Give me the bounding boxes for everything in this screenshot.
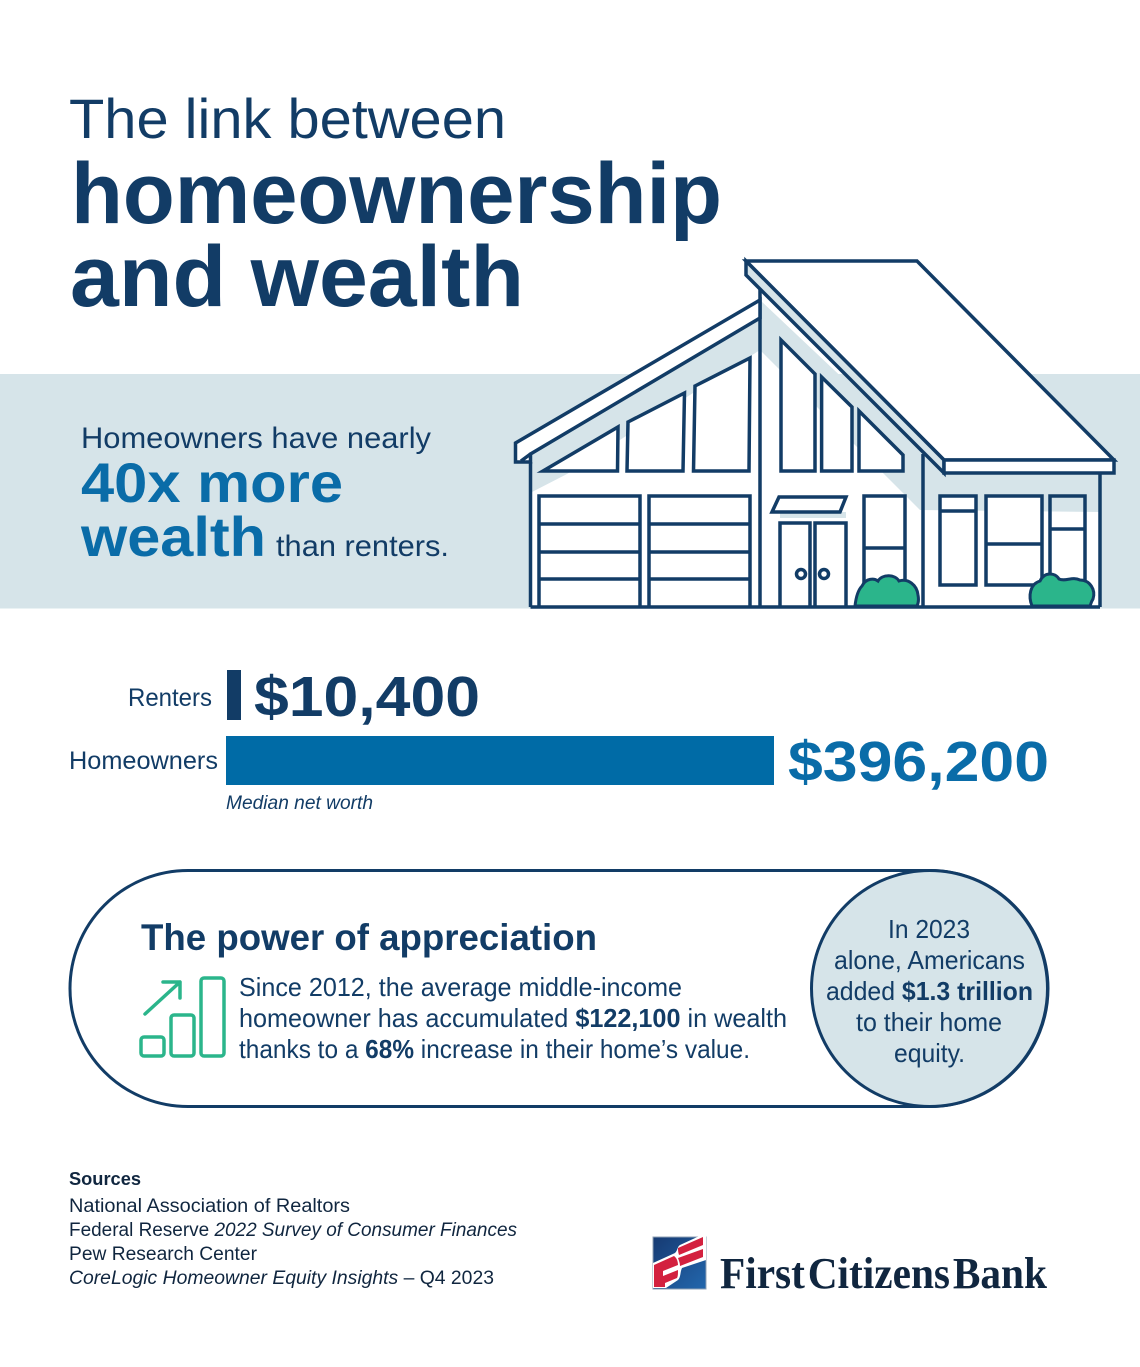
banner statement	[80, 422, 449, 568]
sources: Federal Reserve 2022 Survey of Consumer Finances	[69, 1220, 517, 1241]
appreciation body text: homeowner has accumulated $122,100 in wealth	[239, 1003, 787, 1033]
bar chart: median net worth: Median net worth	[226, 793, 373, 814]
title: The link between	[69, 87, 506, 150]
appreciation body text	[239, 972, 787, 1064]
callout: 1.3 trillion circle: added $1.3 trillion	[826, 976, 1033, 1006]
panel: wealth comparison banner	[0, 374, 1140, 608]
sources: Pew Research Center	[69, 1244, 258, 1265]
callout: 1.3 trillion circle: In 2023	[888, 914, 970, 944]
callout: 1.3 trillion circle: equity.	[894, 1038, 965, 1068]
banner statement: Homeowners have nearly	[81, 422, 431, 455]
banner statement: wealth	[80, 505, 266, 568]
appreciation body text: Since 2012, the average middle-income	[239, 972, 682, 1002]
title: and wealth	[70, 229, 524, 325]
sources: CoreLogic Homeowner Equity Insights – Q4 2023	[69, 1268, 494, 1289]
bar chart: median net worth: Homeowners	[69, 747, 218, 775]
banner statement: than renters.	[276, 530, 449, 563]
logo: First Citizens Bank	[653, 1233, 1047, 1298]
icon: growth bars and arrow	[141, 978, 224, 1056]
panel: the power of appreciation	[70, 870, 1048, 1106]
bar chart: median net worth	[69, 665, 1049, 814]
title	[69, 87, 722, 325]
title: homeownership	[71, 146, 722, 242]
banner statement: 40x more	[81, 451, 343, 514]
bar chart: median net worth: $10,400	[254, 665, 480, 729]
callout: 1.3 trillion circle: alone, Americans	[834, 945, 1025, 975]
appreciation body text: thanks to a 68% increase in their home’s value.	[239, 1034, 750, 1064]
icon: house illustration	[516, 261, 1114, 607]
callout: 1.3 trillion circle: to their home	[856, 1007, 1002, 1037]
sources	[69, 1169, 517, 1289]
icon: flag emblem	[653, 1233, 706, 1289]
appreciation heading: The power of appreciation	[141, 917, 597, 958]
sources: Sources	[69, 1169, 141, 1189]
callout: 1.3 trillion circle	[812, 870, 1048, 1106]
bar chart: median net worth: Renters	[128, 684, 212, 712]
bar chart: median net worth: $396,200	[788, 730, 1049, 794]
logo: First Citizens Bank: First Citizens Bank	[720, 1249, 1047, 1298]
sources: National Association of Realtors	[69, 1196, 350, 1217]
